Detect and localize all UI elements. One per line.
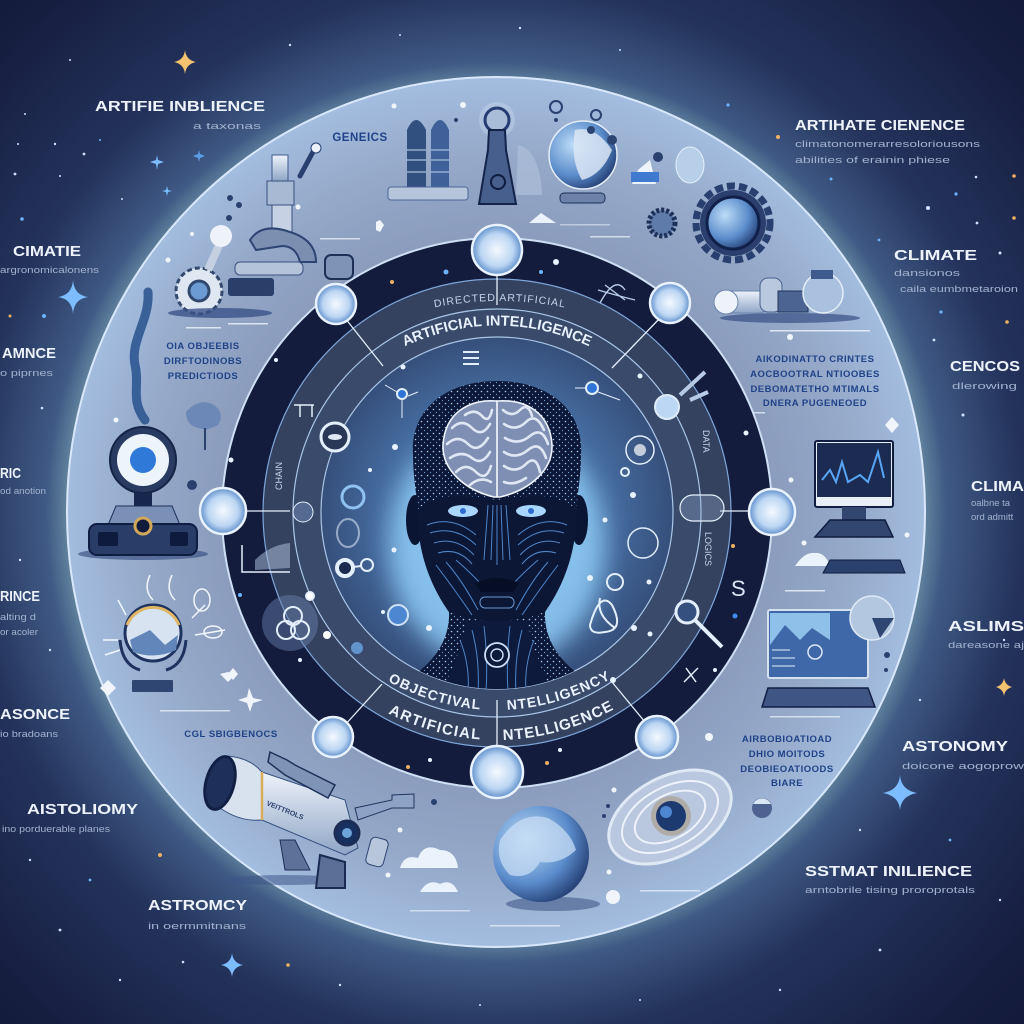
brain (443, 401, 552, 497)
labels in the dial: LOGICS (703, 532, 713, 566)
label: nance: o piprnes (0, 368, 53, 379)
spokes (240, 270, 752, 750)
bottom ring lettering: ARTIFICIAL (388, 706, 480, 740)
label: nance (0, 345, 56, 379)
labels in the dial: S (731, 576, 746, 601)
small disc texts: DHIO MOITODS (749, 749, 825, 760)
label: aistolomy: AISTOLIOMY (27, 801, 138, 818)
icon: telescope: VEITTROLS (265, 800, 305, 822)
small disc texts: GENEICS (332, 132, 388, 144)
bottom ring lettering: OBJECTIVAL (390, 674, 480, 710)
label: clima: oalbne ta (971, 498, 1011, 509)
icon: desktop monitor (815, 441, 905, 573)
icon: cloud (400, 213, 830, 892)
label: astonomy: ASTONOMY (902, 738, 1008, 755)
label: rince: alting d (0, 612, 36, 623)
label: top left (95, 98, 265, 132)
label: nance: AMNCE (2, 345, 56, 362)
disc decorations (100, 102, 910, 926)
inner dial (321, 337, 673, 689)
label: astonomy: doicone aogoprow (902, 761, 1024, 772)
outer disc (67, 77, 925, 947)
label: climate right: CLIMATE (894, 247, 977, 264)
label: cencos: CENCOS (950, 358, 1020, 375)
label: ssmat (805, 863, 975, 896)
label: top left: ARTIFIE INBLIENCE (95, 98, 265, 115)
icon: laptop (762, 596, 894, 707)
label: asonce (0, 706, 70, 740)
label: climate right: caila eumbmetaroion (900, 284, 1018, 295)
icon: microscope (168, 143, 353, 318)
label: aistolomy (2, 801, 138, 835)
icon: top towers (388, 120, 468, 200)
icon: mirror lens (103, 575, 225, 692)
small disc texts: AOCBOOTRAL NTIOOBES (750, 369, 880, 380)
label: clima: CLIMA (971, 478, 1024, 495)
ring nodes (200, 225, 795, 798)
label: clima (971, 478, 1024, 523)
icon: top bottle (479, 102, 542, 204)
label: top right (795, 117, 980, 166)
neck emblem (485, 643, 509, 667)
bottom ring lettering (388, 670, 614, 740)
label: aslims: ASLIMS (948, 618, 1024, 635)
icon: left smoke (134, 292, 148, 420)
middle rings (263, 279, 731, 747)
label: climate left: argronomicalonens (0, 265, 99, 276)
label: cencos: dlerowing (952, 381, 1017, 392)
labels in the dial: CHAIN (274, 462, 284, 490)
label: climate right (894, 247, 1018, 295)
icon: webcam robot (78, 427, 208, 560)
label: ric: RIC (0, 465, 21, 482)
face glow (389, 423, 605, 667)
small disc texts: DEBOMATETHO MTIMALS (750, 384, 880, 395)
label: astonomy (902, 738, 1024, 772)
labels in the dial (274, 430, 746, 601)
small disc texts: DEOBIEOATIOODS (740, 764, 834, 775)
label: top right: abilities of erainin phiese (795, 155, 950, 166)
top ring lettering: DIRECTED ARTIFICIAL (434, 294, 564, 308)
label: aistolomy: ino porduerable planes (2, 824, 110, 835)
label: ric: od anotion (0, 486, 46, 497)
label: top right: ARTIHATE CIENENCE (795, 117, 965, 134)
small disc texts: AIKODINATTO CRINTES (756, 354, 874, 365)
labels in the dial: DATA (701, 430, 711, 453)
label: rince: or acoler (0, 627, 38, 638)
label: ssmat: SSTMAT INILIENCE (805, 863, 972, 880)
inner dial icons (242, 285, 724, 682)
small disc texts: PREDICTIODS (168, 371, 238, 382)
label: astromcy: ASTROMCY (148, 897, 247, 914)
label: asonce: io bradoans (0, 729, 58, 740)
label: aslims (948, 618, 1024, 651)
label: astromcy: in oermmitnans (148, 921, 246, 932)
dark ring band (222, 238, 772, 788)
label: rince (0, 588, 40, 638)
small disc texts: BIARE (771, 778, 803, 789)
label: climate right: dansionos (894, 268, 960, 279)
face contour lines (427, 505, 567, 692)
icon: leaf tree (186, 402, 221, 450)
small disc texts: DNERA PUGENEOED (763, 398, 867, 409)
top ring lettering (404, 294, 592, 346)
small disc texts: OIA OBJEEBIS (166, 341, 240, 352)
label: cencos (950, 358, 1020, 392)
icon: gear lens (696, 186, 770, 260)
small disc texts (164, 132, 880, 789)
label: astromcy (148, 897, 247, 932)
icon: telescope (199, 752, 414, 888)
inner dial dots (228, 259, 748, 769)
top ring lettering: ARTIFICIAL INTELLIGENCE (404, 316, 592, 346)
label: aslims: dareasone aj (948, 640, 1024, 651)
label: asonce: ASONCE (0, 706, 70, 723)
small disc texts: AIRBOBIOATIOAD (742, 734, 832, 745)
bottom ring lettering: NTELLIGENCY (507, 670, 608, 710)
label: rince: RINCE (0, 588, 40, 605)
label: ric (0, 465, 46, 497)
eyes (448, 505, 478, 517)
bottom ring lettering: NTELLIGENCE (503, 700, 614, 740)
label: top left: a taxonas (193, 121, 261, 132)
small disc texts: DIRFTODINOBS (164, 356, 242, 367)
label: clima: ord admitt (971, 512, 1014, 523)
icon: saturn rings (593, 751, 772, 883)
small disc texts: CGL SBIGBENOCS (184, 729, 278, 740)
label: ssmat: arntobrile tising proroprotals (805, 885, 975, 896)
label: climate left: CIMATIE (13, 243, 81, 260)
head figure (406, 381, 588, 689)
icon: lab bench (714, 270, 860, 323)
label: top right: climatonomerarresoloriousons (795, 139, 980, 150)
icon: small gear (649, 210, 675, 236)
lips (475, 578, 519, 592)
icon: top globe (549, 101, 617, 203)
icon: stacked cone (631, 147, 704, 184)
icon: planet (493, 806, 600, 911)
label: climate left (0, 243, 99, 276)
